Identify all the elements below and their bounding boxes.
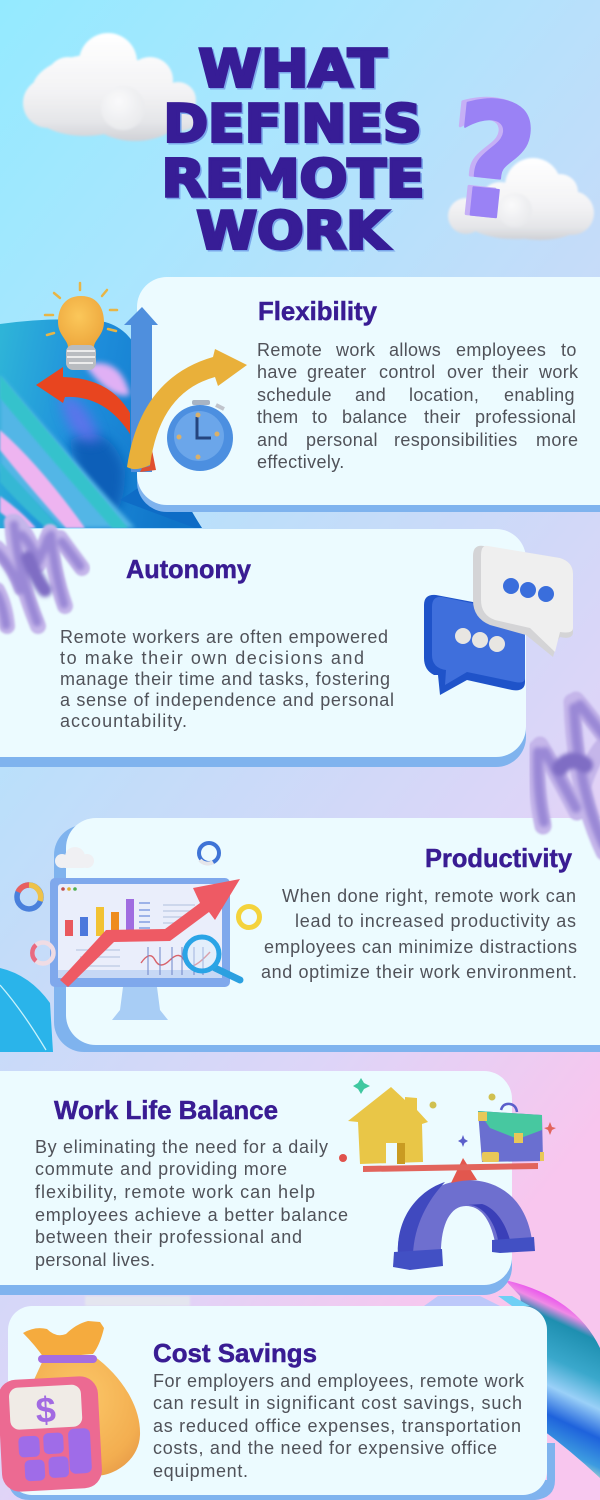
white bubble — [473, 546, 573, 657]
text: productivity body: lead to increased productivity as — [295, 911, 576, 931]
icon: flexibility arrows, bulb and clock — [36, 283, 247, 472]
text: flexibility body: and — [257, 430, 288, 450]
decorative purple coil: left — [0, 522, 82, 626]
text: flexibility body: Remote — [257, 340, 322, 360]
text: flexibility body: control — [379, 362, 435, 382]
decorative purple coil: right — [537, 700, 600, 852]
list lines — [139, 903, 150, 928]
text: cost savings body: equipment. — [153, 1461, 248, 1481]
text: flexibility body: enabling — [504, 385, 575, 405]
text: flexibility body: have — [257, 362, 297, 382]
house — [348, 1087, 428, 1164]
text: flexibility body: work — [335, 340, 376, 360]
text: flexibility body: employees — [456, 340, 546, 360]
icon: question mark: ? — [437, 67, 542, 258]
text: cost savings body: costs, and the need for expensive office — [153, 1438, 497, 1458]
small cloud — [55, 847, 94, 868]
arch feet — [393, 1249, 443, 1270]
monitor frame — [50, 878, 230, 987]
calculator — [0, 1375, 103, 1493]
icon: money bag and calculator — [0, 1321, 140, 1493]
text: work life balance body: commute and providing more — [35, 1159, 287, 1179]
icon: work life balance scale — [339, 1078, 556, 1270]
text: autonomy body: manage their time and tasks, fostering — [60, 669, 390, 689]
text: flexibility body: balance — [342, 407, 408, 427]
text: flexibility body: to — [312, 407, 328, 427]
decorative shape behind cost savings card — [85, 1296, 530, 1306]
text: autonomy body: to make their own decisions and — [60, 648, 364, 668]
text: flexibility body: work — [538, 362, 579, 382]
text: flexibility body: responsibilities — [394, 430, 518, 450]
briefcase — [478, 1104, 544, 1162]
text: flexibility heading: Flexibility — [258, 296, 378, 326]
panel: productivity card — [54, 818, 600, 1052]
text: flexibility body: professional — [475, 407, 576, 427]
text: autonomy body: accountability. — [60, 711, 187, 731]
title shadow: WHAT — [200, 41, 389, 101]
text: flexibility body: their — [424, 407, 461, 427]
text: work life balance body: employees achieve a better balance — [35, 1205, 348, 1225]
text: work life balance body: flexibility, remote work can help — [35, 1182, 315, 1202]
trend arrow — [60, 879, 240, 987]
icon: question mark: ? — [442, 66, 545, 258]
blue bubble — [424, 595, 525, 695]
title shadow: REMOTE — [163, 151, 426, 211]
decorative iridescent blob: bottom right — [505, 1280, 600, 1478]
text: flexibility body: schedule — [257, 385, 332, 405]
title text: REMOTE — [162, 150, 424, 210]
fulcrum — [451, 1158, 477, 1183]
text: flexibility body: them — [257, 407, 298, 427]
icon: right cloud — [448, 158, 594, 240]
plank — [363, 1163, 538, 1172]
arch — [398, 1180, 532, 1258]
bag band — [38, 1355, 97, 1363]
text: flexibility body: allows — [389, 340, 441, 360]
stopwatch — [167, 400, 233, 471]
blue arrow — [124, 307, 158, 472]
text: flexibility body: greater — [307, 362, 366, 382]
text: flexibility body: to — [561, 340, 577, 360]
title text: DEFINES — [164, 94, 422, 154]
panel: cost savings card — [8, 1306, 555, 1500]
title — [162, 40, 426, 263]
line chart — [141, 952, 210, 966]
window dots — [61, 887, 77, 891]
text: productivity body — [261, 886, 577, 982]
text: cost savings body: For employers and employees, remote work — [153, 1371, 525, 1391]
text: autonomy body: Remote workers are often empowered — [60, 627, 388, 647]
title text: WHAT — [198, 40, 387, 100]
text: work life balance body: personal lives. — [35, 1250, 155, 1270]
icon: speech bubbles — [424, 546, 573, 695]
text: productivity heading: Productivity — [425, 843, 573, 873]
text: flexibility body: their — [492, 362, 529, 382]
text: productivity body: When done right, remote work can — [282, 886, 576, 906]
text: flexibility body: effectively. — [257, 452, 345, 472]
bag top — [23, 1321, 104, 1358]
decorative iridescent blob: upper left — [0, 316, 205, 530]
text: cost savings body: can result in significant cost savings, such — [153, 1393, 522, 1413]
text: work life balance body: By eliminating the need for a daily — [35, 1137, 328, 1157]
title shadow: DEFINES — [165, 96, 423, 156]
calculator: $ — [35, 1389, 57, 1431]
title shadow — [163, 41, 426, 263]
text: flexibility body: location, — [409, 385, 479, 405]
bar chart — [65, 899, 134, 936]
text: flexibility body: more — [536, 430, 578, 450]
panel: flexibility card — [137, 277, 600, 512]
text: cost savings body — [153, 1371, 525, 1481]
red arrow — [36, 367, 130, 434]
bag body — [33, 1356, 140, 1476]
title text: WORK — [196, 202, 390, 262]
text: flexibility body: and — [355, 385, 386, 405]
panel: work life balance card — [0, 1071, 512, 1295]
text: flexibility body: personal — [306, 430, 378, 450]
monitor stand — [112, 987, 168, 1020]
title shadow: WORK — [198, 203, 392, 263]
icon: left cloud — [23, 33, 199, 141]
text: productivity body: employees can minimize distractions — [264, 937, 577, 957]
text: productivity body: and optimize their work environment. — [261, 962, 577, 982]
text: flexibility body: over — [447, 362, 483, 382]
yellow arrow — [127, 349, 247, 469]
decorative iridescent blob: left of productivity card — [0, 968, 53, 1052]
text: work life balance body: between their professional and — [35, 1227, 302, 1247]
text: autonomy body: a sense of independence and personal — [60, 690, 394, 710]
icon: analytics monitor — [17, 843, 260, 1020]
light bulb — [45, 283, 117, 370]
text: cost savings body: as reduced office expenses, transportation — [153, 1416, 521, 1436]
title text — [162, 40, 424, 262]
text: autonomy body — [60, 627, 394, 731]
ring charts — [17, 843, 260, 964]
text: cost savings heading: Cost Savings — [153, 1338, 317, 1368]
magnifier — [185, 937, 240, 980]
panel: autonomy card — [0, 529, 526, 767]
sparkles and dots — [339, 1078, 556, 1162]
text: autonomy heading: Autonomy — [126, 554, 252, 584]
text: work life balance heading: Work Life Balance — [54, 1095, 278, 1125]
text: work life balance body — [35, 1137, 348, 1270]
